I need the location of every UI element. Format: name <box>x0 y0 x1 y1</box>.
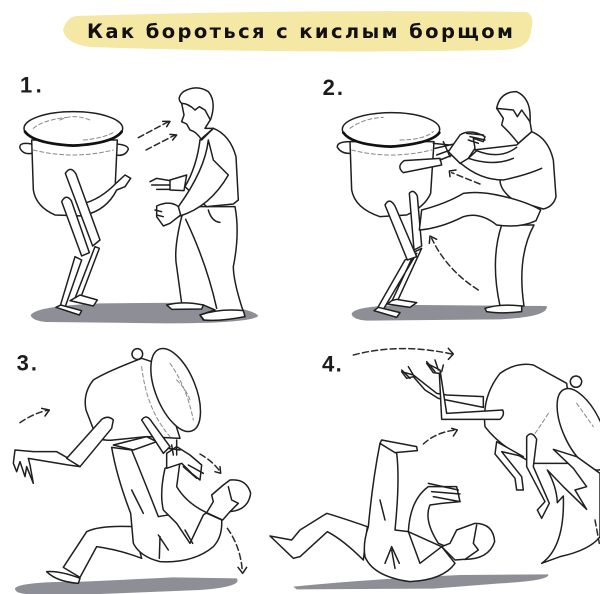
pot arm 1 <box>82 175 131 215</box>
man 4 <box>270 440 495 582</box>
title banner: Как бороться с кислым борщом <box>87 20 513 43</box>
pot 1 <box>20 112 128 216</box>
number 4: 4. <box>322 352 342 377</box>
pot limbs 3 <box>13 417 170 483</box>
panel 1 <box>20 73 258 323</box>
arrows 4 <box>353 348 599 543</box>
title banner <box>63 11 532 51</box>
shadow 1 <box>31 303 258 323</box>
panel 4 <box>270 348 600 589</box>
man 2 <box>419 92 556 313</box>
pot 2 <box>337 113 457 217</box>
arrows 3 <box>20 408 247 573</box>
pot limbs 4 <box>402 360 549 518</box>
pot legs 2 <box>374 191 422 317</box>
man 3 <box>47 440 251 583</box>
pot legs 1 <box>56 169 100 315</box>
pot 4 <box>484 364 600 477</box>
shadow 4 <box>293 574 548 589</box>
number 3: 3. <box>17 351 37 376</box>
panel 2 <box>323 75 556 321</box>
arrows 2 <box>429 170 480 290</box>
shadow 2 <box>352 305 547 321</box>
pot 3 <box>85 342 211 440</box>
arrows 1 <box>138 121 177 150</box>
number 2: 2. <box>323 75 343 100</box>
panel 3 <box>13 342 251 594</box>
shadow 3 <box>15 577 238 594</box>
man 1 <box>150 88 245 320</box>
flame 4 <box>542 449 600 563</box>
number 1: 1. <box>20 73 42 98</box>
